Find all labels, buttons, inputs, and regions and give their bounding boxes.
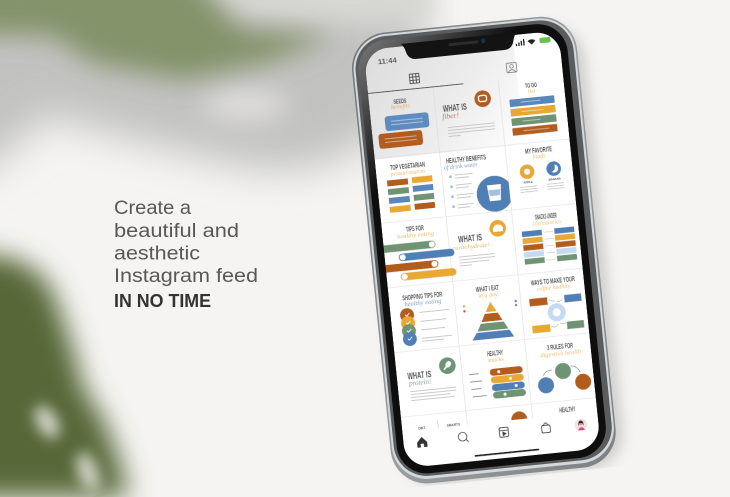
post: healthy benefits: HEALTHY BENEFITS xyxy=(446,154,487,165)
tab icon: grid xyxy=(409,73,420,84)
post: ways to make your: coffee healthy xyxy=(537,283,571,293)
post: healthy sliders: HEALTHY xyxy=(487,350,504,358)
post: shopping tips: SHOPPING TIPS FOR xyxy=(402,292,443,303)
post: snacks under: 100 calories xyxy=(531,219,562,228)
post: what is fiber: WHAT IS xyxy=(442,102,467,115)
post: my favorite: foods xyxy=(532,152,547,161)
post: what is carbohydrate xyxy=(452,220,506,266)
grey shadow mass xyxy=(0,0,420,190)
next row of posts: HEALTHY xyxy=(559,406,576,415)
post: my favorite xyxy=(516,145,565,193)
green leaf, top xyxy=(0,0,335,80)
post: healthy sliders xyxy=(468,350,526,399)
green leaf, bottom xyxy=(0,214,136,490)
post: my favorite: BANANA xyxy=(549,176,561,182)
tab underline xyxy=(368,83,463,94)
post: tips for healthy eating xyxy=(384,225,456,281)
post: seeds xyxy=(378,98,430,149)
nav avatar xyxy=(574,418,588,432)
nav icon: reels xyxy=(499,427,509,437)
post: tips for healthy eating: TIPS FOR xyxy=(406,225,424,234)
feed grid xyxy=(378,81,596,430)
post: 3 rules xyxy=(534,341,592,394)
post: ways to make your: WAYS TO MAKE YOUR xyxy=(531,276,575,287)
post: tips for healthy eating: healthy eating xyxy=(397,230,435,241)
post: seeds: benefits xyxy=(391,102,411,111)
post: to do: list xyxy=(528,89,536,95)
post: what is protein: protein! xyxy=(408,378,432,388)
blurred plant shadows xyxy=(0,0,430,495)
post: to do xyxy=(508,80,558,136)
screen xyxy=(360,30,601,471)
nav icon: search xyxy=(458,432,469,443)
post: what is fiber: fiber! xyxy=(442,110,460,121)
post: healthy benefits: of drink water xyxy=(444,161,479,172)
post: what is protein: WHAT IS xyxy=(407,369,432,382)
tab icon: tagged xyxy=(506,62,517,73)
phone xyxy=(349,13,627,489)
post: what is fiber xyxy=(440,90,496,137)
post: what i eat pyramid: in a day xyxy=(478,292,498,300)
post: snacks under xyxy=(520,211,577,265)
headline text block: Create a xyxy=(114,198,191,219)
home indicator xyxy=(475,449,539,457)
status icons xyxy=(515,36,551,46)
post: top vegetarian xyxy=(385,161,435,213)
post: shopping tips xyxy=(398,291,452,347)
post: what i eat pyramid: WHAT I EAT xyxy=(476,285,500,294)
post: healthy sliders: snacks xyxy=(488,357,505,364)
next row of posts: DIET xyxy=(418,426,426,431)
post: 3 rules: digestive health xyxy=(540,348,581,359)
post: top vegetarian: TOP VEGETARIAN xyxy=(390,162,425,172)
post: shopping tips: healthy eating xyxy=(404,298,442,308)
next row of posts: SMARTS xyxy=(446,422,460,428)
headline text block: beautiful and xyxy=(114,221,239,242)
headline text block: aesthetic xyxy=(114,244,200,264)
post: snacks under: SNACKS UNDER xyxy=(535,213,557,222)
phone body xyxy=(349,13,619,487)
headline text block xyxy=(114,198,258,311)
post: to do: TO DO xyxy=(525,82,537,90)
headline text block: Instagram feed xyxy=(114,266,258,287)
post: my favorite: MY FAVORITE xyxy=(525,146,553,156)
post: seeds: SEEDS xyxy=(393,98,407,106)
notch xyxy=(401,32,518,60)
post: top vegetarian: protein sources xyxy=(390,169,427,178)
post: what is carbohydrate: WHAT IS xyxy=(458,232,483,246)
post: what is carbohydrate: carbohydrate! xyxy=(452,242,490,252)
grid dividers xyxy=(368,74,597,432)
post: ways to make your xyxy=(527,276,584,333)
post: 3 rules: 3 RULES FOR xyxy=(547,343,573,352)
nav icon: home xyxy=(416,436,428,448)
bottom navigation bar xyxy=(417,418,588,466)
phone shadow xyxy=(359,22,627,488)
post: what i eat pyramid xyxy=(462,284,518,341)
headline text block: IN NO TIME xyxy=(114,291,211,311)
status bar time: 11:44 xyxy=(377,55,398,66)
post: what is protein xyxy=(406,357,459,401)
post: my favorite: APPLE xyxy=(523,180,533,185)
post: healthy benefits xyxy=(444,154,511,212)
nav icon: shop xyxy=(541,423,551,433)
next row of posts xyxy=(418,406,576,430)
